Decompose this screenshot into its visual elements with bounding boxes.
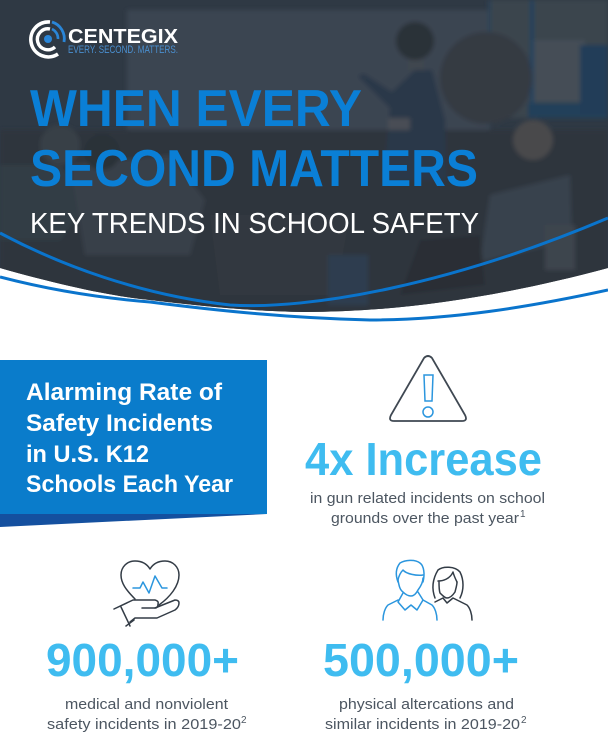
panel body (0, 360, 267, 514)
panel heading: Safety Incidents (26, 410, 213, 437)
stat: 500,000+ (323, 634, 527, 733)
header background photo (0, 0, 608, 320)
icon: heart in hand (114, 561, 179, 626)
panel heading: in U.S. K12 (26, 441, 149, 468)
icon: warning triangle (390, 356, 466, 421)
stat description (47, 696, 247, 733)
logo mark (31, 22, 64, 57)
panel heading: Schools Each Year (26, 471, 233, 498)
stat description: grounds over the past year (331, 510, 519, 527)
title: WHEN EVERY (30, 80, 362, 138)
stat description: 1 (520, 509, 526, 520)
stat: 900,000+: 900,000+ (46, 634, 239, 686)
stat: 4x increase (305, 433, 545, 527)
logo (31, 22, 179, 57)
stat: 500,000+: 500,000+ (323, 634, 519, 686)
stat description: 2 (241, 715, 247, 726)
stat description: similar incidents in 2019-20 (325, 716, 520, 733)
logo wordmark: CENTEGIX (68, 26, 179, 48)
subtitle: KEY TRENDS IN SCHOOL SAFETY (30, 208, 479, 240)
panel shadow strip (0, 513, 267, 527)
title: SECOND MATTERS (30, 140, 478, 198)
stat: 4x increase: 4x Increase (305, 433, 542, 485)
stat description (310, 490, 545, 527)
title (30, 80, 478, 198)
logo tagline: EVERY. SECOND. MATTERS. (68, 44, 178, 56)
panel heading: Alarming Rate of (26, 379, 223, 406)
wave: lower blue curve (0, 277, 608, 320)
stat description: physical altercations and (339, 696, 514, 713)
stat description: 2 (521, 715, 527, 726)
stat description: safety incidents in 2019-20 (47, 716, 241, 733)
stat description: medical and nonviolent (65, 696, 229, 713)
panel heading (26, 379, 233, 498)
stat description (325, 696, 527, 733)
wave: upper blue curve (0, 218, 608, 306)
stat description: in gun related incidents on school (310, 490, 545, 507)
stat: 900,000+ (46, 634, 247, 733)
panel: alarming rate (0, 360, 267, 527)
icon: two people (383, 560, 472, 620)
